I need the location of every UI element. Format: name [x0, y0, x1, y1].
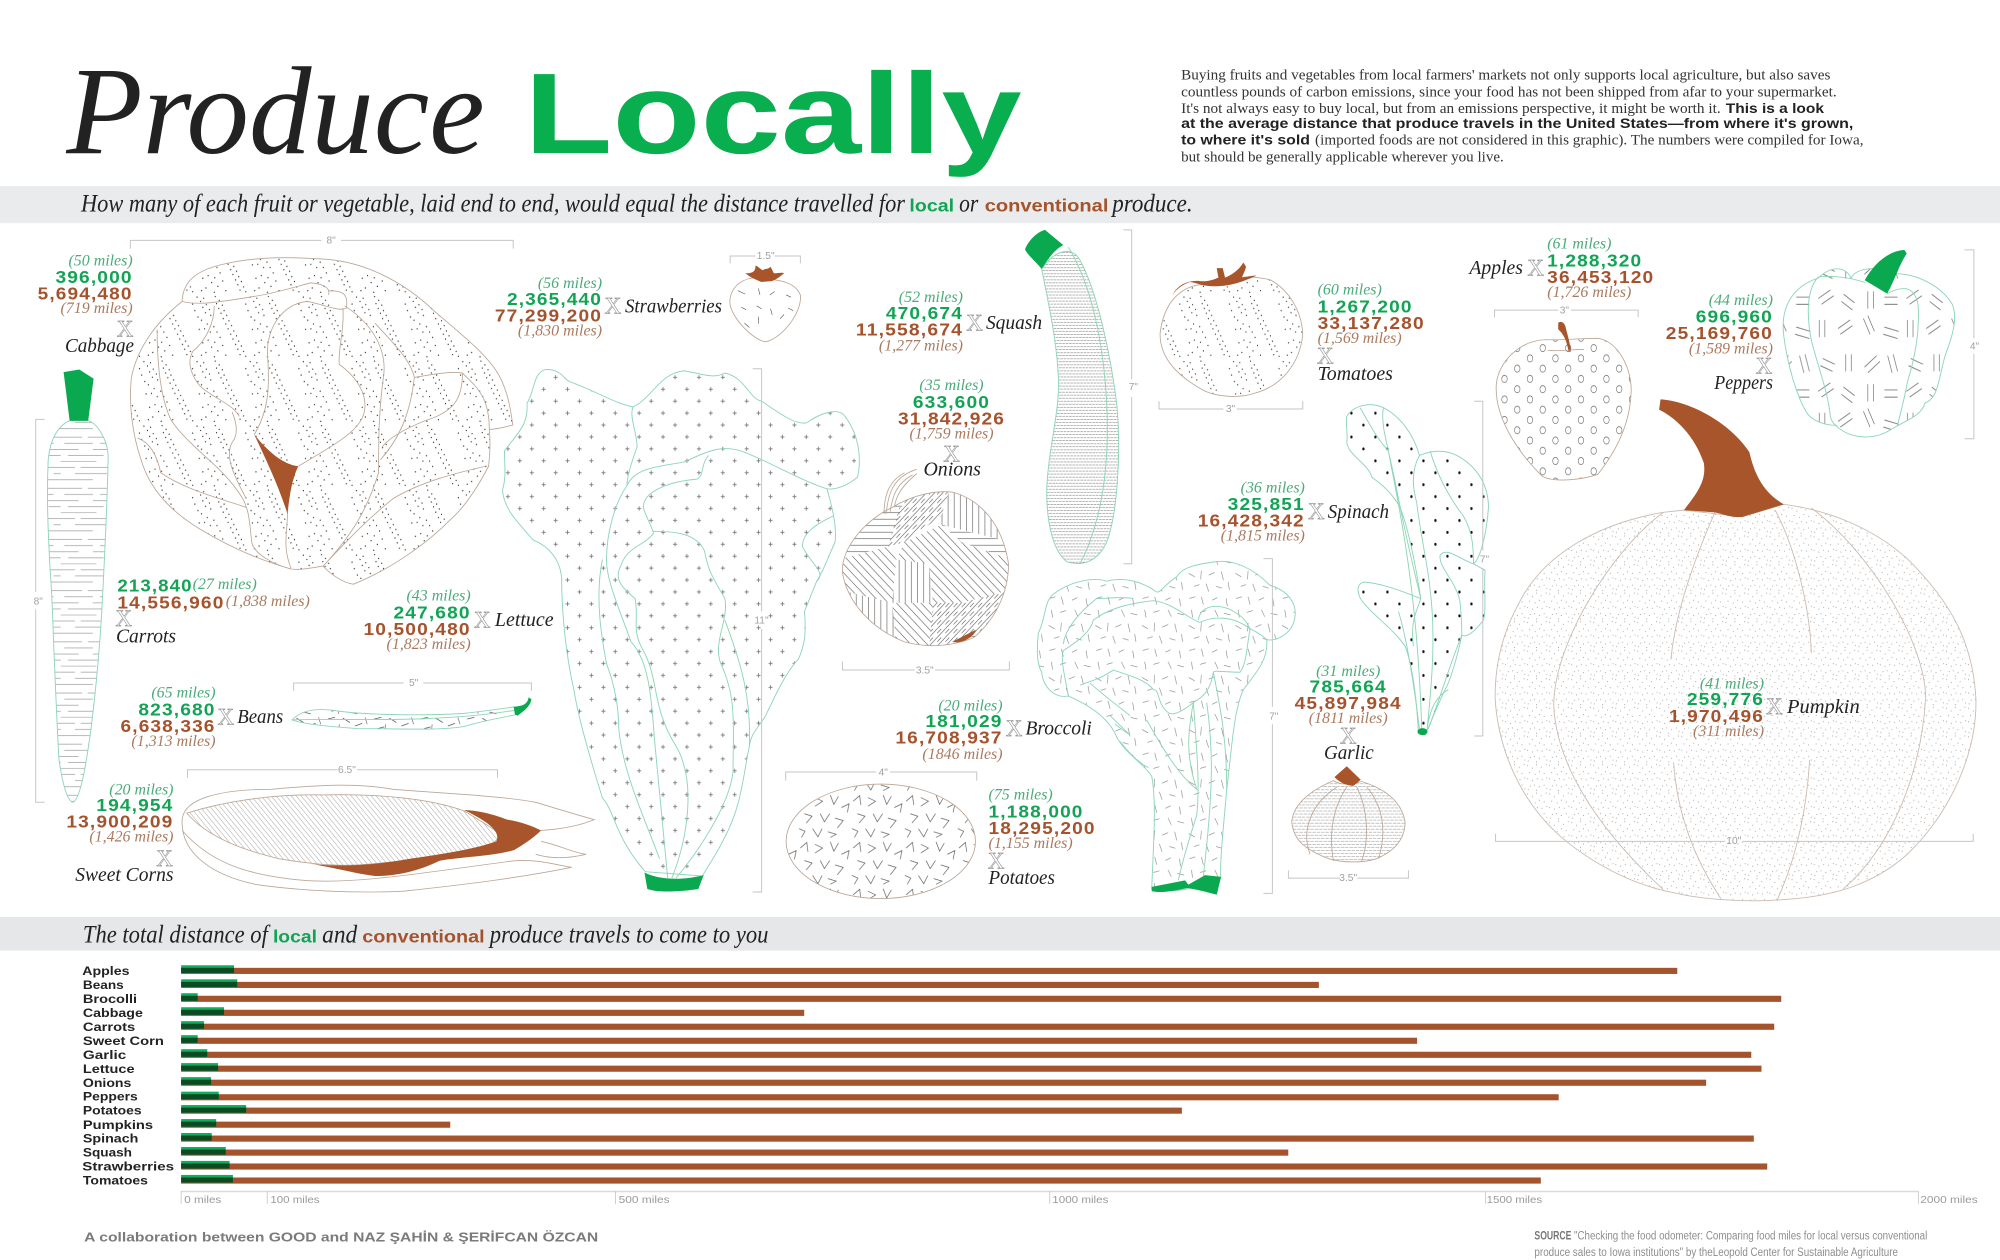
stat block: peppers: Peppers: [1713, 372, 1773, 394]
row: Peppers: [83, 1090, 1559, 1104]
apple stem: [1558, 322, 1571, 352]
stat block: tomatoes: (60 miles): [1318, 282, 1382, 299]
row: Pumpkins: [83, 1118, 450, 1132]
row: Onions: [83, 1076, 1706, 1090]
stat block: garlic: X: [1340, 724, 1357, 749]
intro text block: Buying fruits and vegetables from local farmers' markets not only supports local agriculture, but also saves: [1181, 68, 1831, 84]
stat block: cabbage: X: [117, 317, 134, 342]
pumpkin ribs: [1554, 508, 1926, 901]
lettuce bracket: [753, 369, 762, 892]
vegetable: potato: [786, 772, 977, 899]
broccoli outline: [1037, 561, 1295, 893]
stat block: onions: 633,600: [913, 392, 990, 412]
corn husk lines: [182, 785, 594, 892]
stat block: sweet corns: [66, 782, 174, 886]
strawberry leaves: [745, 265, 784, 282]
stat block: broccoli: (1846 miles): [922, 746, 1003, 763]
stat block: peppers: (44 miles): [1709, 292, 1773, 309]
corn ear: [187, 795, 498, 865]
stat block: sweet corns: (1,426 miles): [89, 829, 173, 846]
row: Spinach: Spinach: [83, 1132, 138, 1146]
stat block: broccoli: Broccoli: [1026, 718, 1092, 740]
beans bracket: [294, 683, 531, 691]
stat block: spinach: 16,428,342: [1198, 511, 1305, 531]
stat block: potatoes: 18,295,200: [989, 818, 1096, 838]
vegetable: carrot: [36, 370, 108, 802]
stat block: garlic: 45,897,984: [1295, 693, 1402, 713]
pumpkin stem: [1659, 399, 1784, 517]
section band and heading: total distance: [0, 917, 2000, 951]
garlic top: [1334, 766, 1361, 786]
stat block: squash: X: [966, 310, 983, 335]
stat block: lettuce: 247,680: [393, 603, 471, 623]
intro text block: (imported foods are not considered in this graphic). The numbers were compiled for Iowa,: [1315, 133, 1864, 149]
stat block: carrots: X: [115, 606, 132, 631]
strawberry body: [730, 278, 801, 342]
onion sprout: [884, 469, 917, 514]
source note: produce sales to Iowa institutions" by theLeopold Center for Sustainable Agriculture: [1534, 1245, 1898, 1259]
stat block: tomatoes: [1317, 282, 1425, 385]
dimension labels: 1.5": [757, 251, 775, 262]
vegetable: spinach: [1346, 401, 1488, 736]
row: Potatoes: [83, 1104, 1182, 1118]
title: [65, 43, 1022, 181]
source note: "Checking the food odometer: Comparing food miles for local versus conventional: [1574, 1229, 1927, 1243]
carrot top: [64, 370, 94, 421]
stat block: apples: 36,453,120: [1547, 267, 1654, 287]
stat block: cabbage: (50 miles): [68, 252, 133, 269]
stat block: potatoes: Potatoes: [988, 867, 1055, 889]
stat block: onions: Onions: [923, 459, 981, 481]
stat block: beans: Beans: [237, 706, 283, 728]
stat block: apples: Apples: [1467, 257, 1523, 279]
title: Locally: [524, 50, 1022, 178]
stat block: beans: (65 miles): [151, 685, 216, 702]
row: Squash: Squash: [83, 1146, 132, 1160]
stat block: strawberries: 77,299,200: [495, 305, 602, 325]
row: Tomatoes: Tomatoes: [83, 1174, 148, 1188]
squash stem: [1025, 230, 1063, 269]
stat block: tomatoes: (1,569 miles): [1318, 330, 1402, 347]
chart axis: 1000 miles: [1052, 1195, 1108, 1206]
stat block: onions: [898, 377, 1005, 481]
row: Beans: Beans: [83, 978, 124, 992]
apple dimple: [1548, 349, 1584, 351]
section band and heading: total distance: and: [322, 921, 358, 948]
stat block: spinach: X: [1308, 499, 1325, 524]
vegetable: tomato: [1159, 262, 1303, 409]
intro text block: This is a look: [1726, 101, 1825, 116]
stat block: potatoes: 1,188,000: [989, 801, 1084, 821]
squash body: [1042, 251, 1119, 563]
row: Carrots: [83, 1020, 1774, 1034]
dimension labels: 7": [1129, 382, 1138, 393]
intro text block: [1181, 68, 1864, 165]
stat block: pumpkin: Pumpkin: [1786, 696, 1860, 718]
stat block: tomatoes: Tomatoes: [1318, 363, 1393, 385]
intro text block: at the average distance that produce travels in the United States—from where it's grown,: [1181, 116, 1853, 131]
row: Cabbage: [83, 1006, 804, 1020]
row: Carrots: Carrots: [83, 1020, 136, 1034]
stat block: broccoli: (20 miles): [938, 697, 1003, 714]
row: Garlic: [83, 1048, 1751, 1062]
intro text block: but should be generally applicable wherever you live.: [1181, 149, 1504, 165]
beans tip: [514, 697, 531, 716]
tomato bracket: [1159, 401, 1303, 409]
cabbage bracket: [130, 240, 513, 249]
vegetable: pepper: [1783, 250, 1974, 439]
stat block: peppers: [1666, 292, 1773, 394]
stat block: potatoes: [988, 787, 1096, 889]
carrot body: [47, 421, 108, 802]
stat block: onions: X: [943, 442, 960, 467]
stat block: sweet corns: X: [156, 846, 173, 871]
chart axis: 2000 miles: [1920, 1195, 1978, 1206]
stat block: cabbage: 396,000: [55, 267, 133, 287]
dimension labels: 3.5": [916, 665, 934, 676]
squash ridge: [1068, 247, 1107, 564]
stat block: strawberries: (56 miles): [538, 275, 602, 292]
stat block: peppers: (1,589 miles): [1689, 340, 1773, 357]
stat block: spinach: (36 miles): [1241, 479, 1305, 496]
stat block: onions: (35 miles): [919, 377, 984, 394]
dimension labels: [34, 236, 1980, 884]
garlic bulb: [1292, 781, 1405, 862]
stat block: peppers: X: [1756, 354, 1773, 379]
stat block: apples: 1,288,320: [1547, 251, 1642, 271]
apple body: [1496, 338, 1631, 480]
dimension labels: 3": [1560, 306, 1569, 317]
broccoli bracket: [1263, 559, 1272, 893]
stat block: carrots: [115, 576, 310, 648]
dimension labels: 7": [1269, 711, 1279, 722]
garlic bracket: [1288, 870, 1408, 878]
stat block: beans: 6,638,336: [121, 716, 216, 736]
tomato body: [1160, 277, 1303, 396]
stat block: squash: 11,558,674: [856, 319, 963, 339]
section band and heading: how many: or: [959, 191, 979, 218]
cabbage outline: [130, 258, 513, 584]
stat block: squash: (52 miles): [899, 289, 963, 306]
section band and heading: total distance: The total distance of: [83, 921, 271, 948]
section band and heading: how many: produce.: [1110, 191, 1193, 218]
stat block: strawberries: [495, 275, 722, 339]
stat block: cabbage: 5,694,480: [38, 284, 133, 304]
row: Tomatoes: [83, 1174, 1541, 1188]
stat block: lettuce: Lettuce: [494, 609, 554, 631]
stat block: spinach: [1198, 479, 1389, 545]
source note: [1534, 1229, 1927, 1259]
stat block: broccoli: 181,029: [925, 711, 1003, 731]
stat block: tomatoes: 1,267,200: [1318, 296, 1413, 316]
stat block: apples: (61 miles): [1547, 236, 1611, 253]
row: Spinach: [83, 1132, 1754, 1146]
stat block: strawberries: 2,365,440: [507, 289, 602, 309]
chart axis: [181, 1191, 1978, 1206]
bar chart: distance travelled: [82, 964, 1781, 1188]
potato bracket: [786, 772, 977, 781]
row: Strawberries: [82, 1160, 1767, 1174]
pepper lobes: [1808, 276, 1918, 426]
row: Squash: [83, 1146, 1288, 1160]
chart axis: 500 miles: [619, 1195, 670, 1206]
stat block: sweet corns: 13,900,209: [66, 812, 173, 832]
stat block: sweet corns: (20 miles): [109, 782, 173, 799]
stat block: apples: (1,726 miles): [1547, 284, 1631, 301]
credit line: A collaboration between GOOD and NAZ ŞAHİN & ŞERİFCAN ÖZCAN: [84, 1230, 598, 1245]
stat block: lettuce: (1,823 miles): [387, 636, 471, 653]
row: Beans: [83, 978, 1319, 992]
stat block: strawberries: (1,830 miles): [518, 322, 602, 339]
source note: SOURCE: [1534, 1229, 1571, 1243]
dimension labels: 4": [1970, 341, 1980, 352]
stat block: apples: [1467, 236, 1654, 301]
lettuce base: [644, 873, 704, 892]
section band and heading: total distance: local: [273, 926, 317, 946]
spinach bracket: [1474, 401, 1483, 736]
row: Apples: [82, 964, 1677, 978]
pepper body: [1783, 269, 1955, 437]
onion bracket: [842, 661, 1009, 670]
row: Onions: Onions: [83, 1076, 132, 1090]
dimension labels: 11": [754, 616, 769, 627]
dimension labels: 3.5": [1339, 873, 1357, 884]
row: Apples: Apples: [82, 964, 130, 978]
stat block: pumpkin: 259,776: [1687, 689, 1764, 709]
stat block: garlic: 785,664: [1310, 676, 1387, 696]
cabbage core: [254, 435, 298, 514]
corn bracket: [188, 770, 498, 778]
row: Lettuce: [83, 1062, 1761, 1076]
vegetable: onion: [839, 469, 1011, 670]
chart axis: 1500 miles: [1487, 1195, 1542, 1206]
vegetable: squash: [1025, 230, 1132, 564]
stat block: lettuce: [364, 588, 554, 653]
vegetable: strawberry: [730, 256, 801, 342]
row: Brocolli: Brocolli: [83, 992, 137, 1006]
tomato stem: [1173, 262, 1257, 295]
dimension labels: 8": [34, 596, 43, 607]
onion hatching: [839, 490, 1011, 655]
vegetable: cabbage: [130, 240, 513, 584]
lettuce inner leaf lines: [599, 407, 833, 878]
stat block: lettuce: (43 miles): [406, 588, 471, 605]
stat block: lettuce: 10,500,480: [364, 619, 471, 639]
stat block: carrots: 14,556,960: [117, 592, 224, 612]
pumpkin body: [1495, 504, 1976, 901]
section band and heading: total distance: produce travels to come to you: [488, 921, 768, 948]
stat block: squash: [856, 289, 1042, 355]
stat block: beans: (1,313 miles): [131, 733, 216, 750]
onion outline: [842, 492, 1009, 646]
section band and heading: how many: local: [909, 196, 954, 216]
row: Sweet Corn: [83, 1034, 1417, 1048]
stat block: carrots: (27 miles): [193, 576, 257, 593]
stat block: onions: 31,842,926: [898, 409, 1005, 429]
stat block: potatoes: (1,155 miles): [989, 835, 1073, 852]
section band and heading: how many: [0, 186, 2000, 223]
stat block: peppers: 696,960: [1696, 307, 1773, 327]
lettuce outline: [502, 370, 859, 876]
beans seam: [292, 710, 514, 720]
row: Cabbage: Cabbage: [83, 1006, 143, 1020]
vegetable: pumpkin: [1495, 399, 1976, 901]
pepper bracket: [1965, 250, 1974, 439]
stat block: squash: Squash: [986, 312, 1042, 334]
stat block: pumpkin: (311 miles): [1693, 723, 1764, 740]
pumpkin bracket: [1496, 834, 1973, 841]
dimension labels: 5": [409, 678, 419, 689]
stat block: squash: (1,277 miles): [879, 338, 963, 355]
stat block: strawberries: X: [605, 294, 622, 319]
vegetable: garlic: [1288, 766, 1408, 878]
vegetable: beans: [292, 683, 531, 729]
stat block: cabbage: Cabbage: [65, 335, 134, 357]
row: Potatoes: Potatoes: [83, 1104, 142, 1118]
dimension labels: 6.5": [338, 765, 356, 776]
stat block: garlic: Garlic: [1324, 742, 1374, 764]
row: Garlic: Garlic: [83, 1048, 127, 1062]
carrot bracket: [36, 419, 45, 802]
garlic cloves: [1307, 787, 1383, 861]
spinach stem tip: [1417, 728, 1427, 735]
corn husk fill: [311, 810, 541, 876]
stat block: sweet corns: Sweet Corns: [75, 864, 174, 886]
stat block: garlic: (31 miles): [1316, 663, 1380, 680]
stat block: pumpkin: X: [1766, 694, 1783, 719]
stat block: garlic: [1295, 663, 1402, 764]
dimension labels: 8": [326, 236, 336, 247]
stat block: tomatoes: 33,137,280: [1318, 313, 1425, 333]
broccoli base: [1152, 875, 1221, 895]
strawberry bracket: [730, 256, 800, 263]
strawberry seeds: [738, 288, 793, 327]
row: Pumpkins: Pumpkins: [83, 1118, 153, 1132]
row: Sweet Corn: Sweet Corn: [83, 1034, 164, 1048]
row: Peppers: Peppers: [83, 1090, 138, 1104]
intro text block: It's not always easy to buy local, but from an emissions perspective, it might be worth it.: [1181, 101, 1721, 117]
row: Brocolli: [83, 992, 1781, 1006]
chart axis: 0 miles: [184, 1195, 221, 1206]
stat block: potatoes: (75 miles): [989, 787, 1053, 804]
apple bracket: [1495, 310, 1638, 317]
section band and heading: how many: How many of each fruit or vegetable, laid end to end, would equal the distance travelled for: [80, 191, 905, 218]
stat block: strawberries: Strawberries: [625, 295, 722, 317]
stat block: pumpkin: 1,970,496: [1669, 706, 1764, 726]
stat block: broccoli: 16,708,937: [895, 728, 1003, 748]
stat block: pumpkin: [1669, 676, 1860, 740]
pepper stem: [1865, 250, 1907, 294]
beans pod: [292, 707, 516, 729]
stat block: beans: 823,680: [138, 699, 216, 719]
spinach veins: [1360, 408, 1473, 733]
dimension labels: 7": [1480, 554, 1489, 565]
dimension labels: 4": [879, 767, 888, 778]
vegetable: sweet corn: [182, 770, 594, 892]
dimension labels: 10": [1726, 836, 1742, 847]
stat block: peppers: 25,169,760: [1666, 323, 1773, 343]
stat block: beans: [121, 685, 283, 750]
stat block: spinach: Spinach: [1328, 501, 1389, 523]
stat block: broccoli: X: [1006, 716, 1023, 741]
stat block: carrots: 213,840: [117, 576, 193, 596]
section band and heading: how many: conventional: [985, 196, 1108, 216]
stat block: lettuce: X: [474, 607, 491, 632]
stat block: beans: X: [217, 704, 234, 729]
stat block: spinach: (1,815 miles): [1221, 528, 1305, 545]
vegetable: lettuce: [502, 369, 859, 892]
stat block: cabbage: (719 miles): [60, 300, 133, 317]
title: Produce: [65, 43, 485, 181]
stat block: onions: (1,759 miles): [909, 426, 994, 443]
onion root: [952, 630, 976, 642]
vegetable: apple: [1495, 310, 1638, 480]
stat block: cabbage: [38, 252, 134, 357]
stat block: squash: 470,674: [886, 303, 963, 323]
stat block: broccoli: [895, 697, 1092, 763]
row: Strawberries: Strawberries: [82, 1160, 174, 1174]
dimension labels: 3": [1226, 404, 1236, 415]
broccoli florets: [1062, 598, 1267, 880]
chart axis: 100 miles: [270, 1195, 320, 1206]
stat block: apples: X: [1527, 255, 1544, 280]
stat block: potatoes: X: [988, 848, 1005, 873]
intro text block: to where it's sold: [1181, 133, 1310, 148]
stat block: sweet corns: 194,954: [96, 795, 173, 815]
stat block: carrots: Carrots: [116, 626, 176, 648]
stat block: tomatoes: X: [1317, 343, 1334, 368]
stat block: carrots: (1,838 miles): [226, 593, 310, 610]
squash bracket: [1123, 230, 1132, 564]
intro text block: countless pounds of carbon emissions, since your food has not been shipped from afar to your supermarket.: [1181, 84, 1837, 100]
row: Lettuce: Lettuce: [83, 1062, 135, 1076]
stat block: pumpkin: (41 miles): [1700, 676, 1764, 693]
cabbage leaf veins: [138, 283, 489, 569]
vegetable: broccoli: [1037, 559, 1295, 895]
potato body: [786, 784, 975, 899]
section band and heading: total distance: conventional: [362, 926, 485, 946]
spinach leaves: [1346, 405, 1488, 735]
stat block: garlic: (1811 miles): [1309, 710, 1388, 727]
stat block: spinach: 325,851: [1228, 494, 1305, 514]
